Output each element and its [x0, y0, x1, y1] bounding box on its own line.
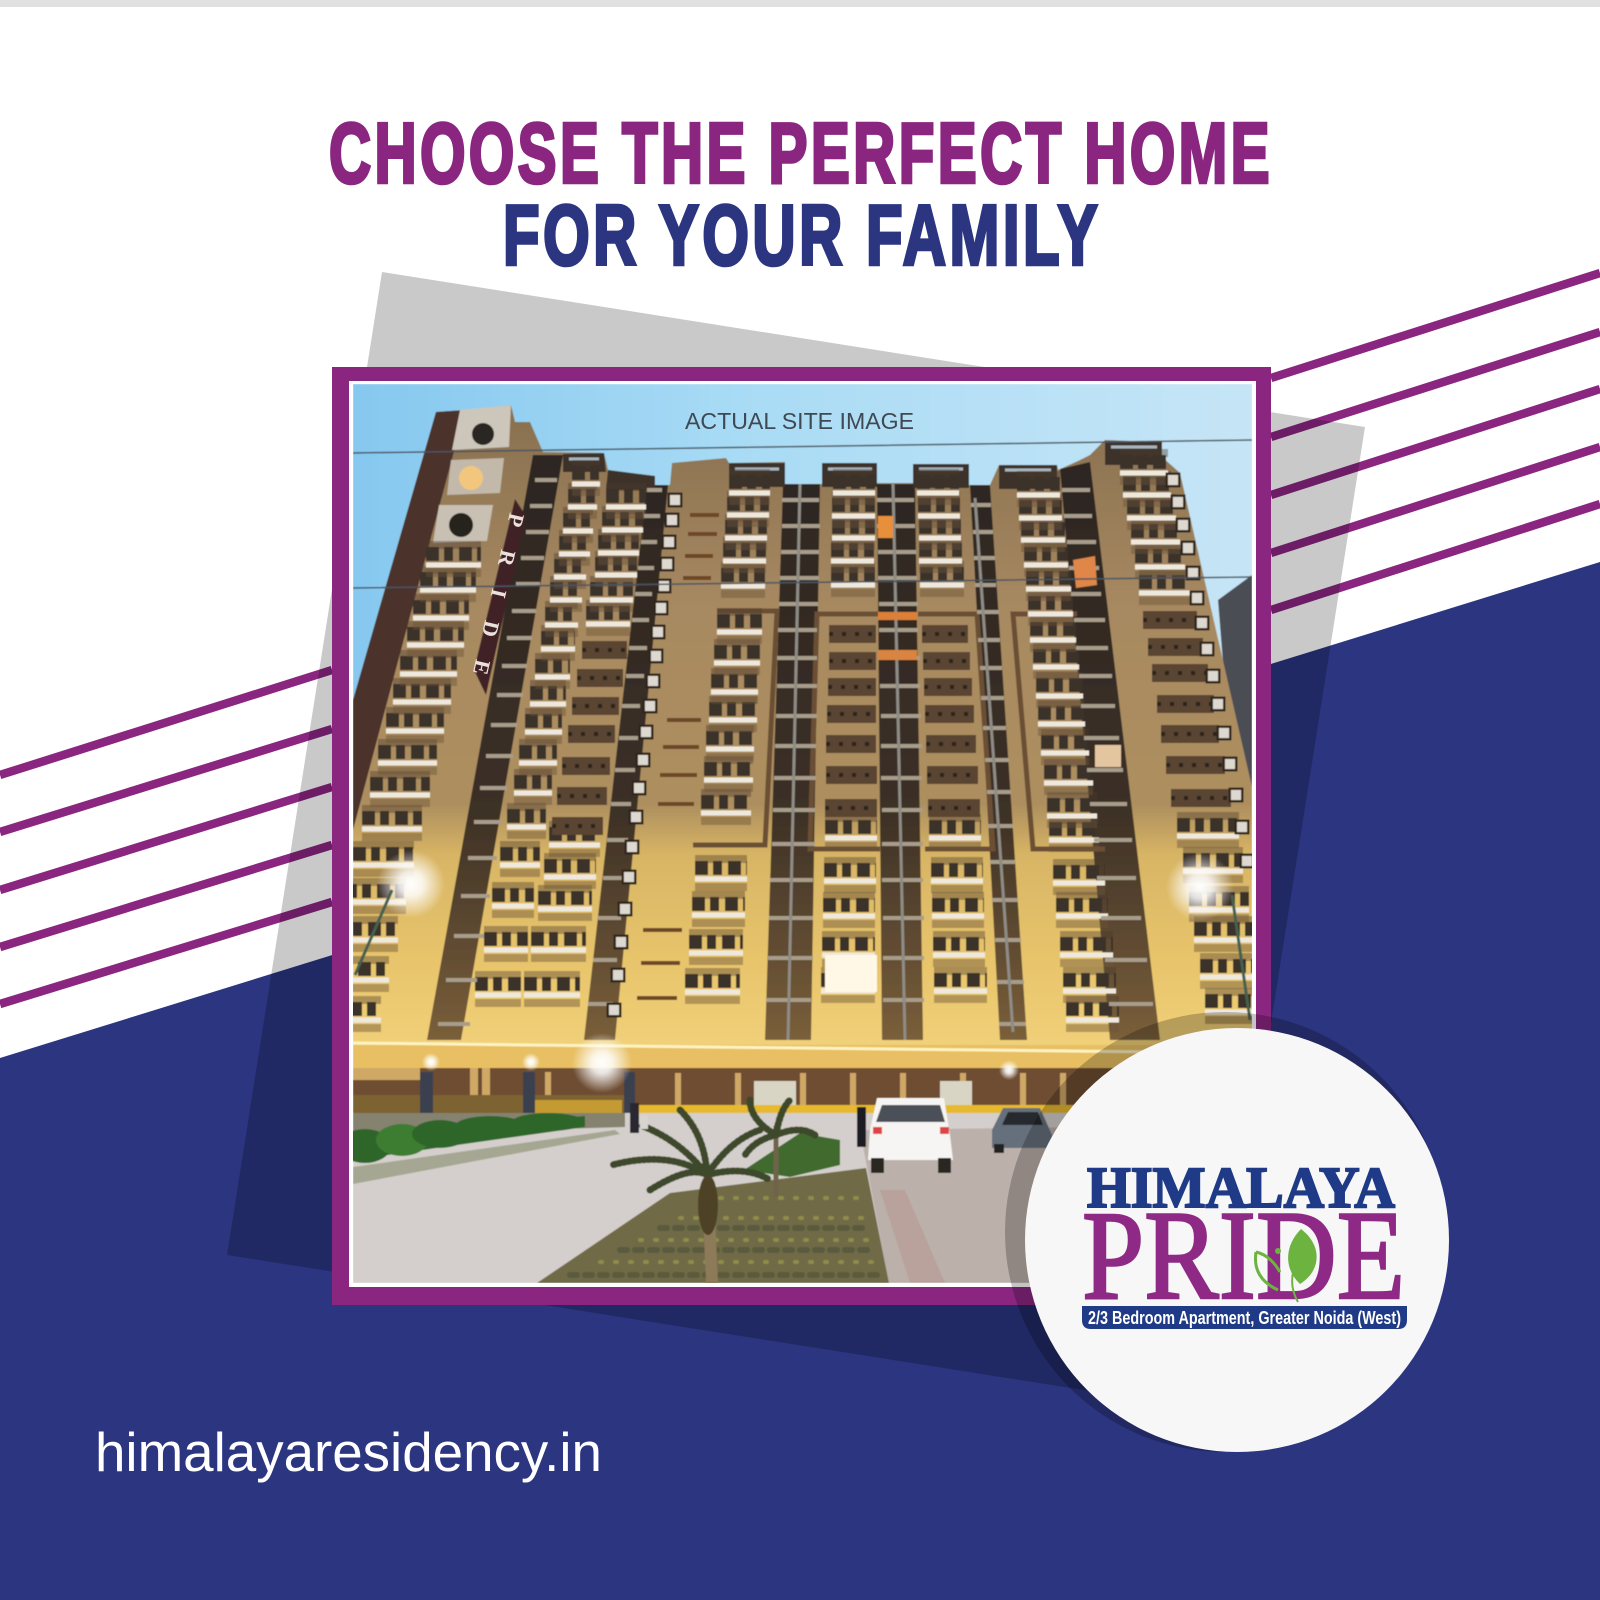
tilted grey square behind photo — [227, 272, 1365, 1410]
grey car — [992, 1108, 1052, 1153]
top grey strip — [0, 0, 1600, 7]
logo circle shadow — [1005, 1012, 1445, 1452]
lit windows — [825, 516, 1121, 992]
hedge — [339, 1113, 585, 1163]
planting bed — [537, 1168, 889, 1283]
balcony upper shade — [316, 453, 1255, 1000]
shaft pipes — [788, 484, 1013, 1040]
building silhouette — [353, 405, 1252, 1070]
wires — [353, 440, 1252, 588]
balcony shadows — [316, 481, 1255, 1028]
balcony slabs — [316, 473, 1255, 1020]
podium — [353, 1041, 1153, 1068]
roof cap highlights — [569, 447, 1157, 470]
brown balcony vents — [552, 620, 1231, 826]
brown floor bands — [693, 611, 1105, 849]
brown balcony blocks — [552, 620, 1231, 826]
street lamps — [355, 850, 1250, 1093]
side walkway — [353, 1130, 620, 1184]
logo tagline banner: 2/3 Bedroom Apartment, Greater Noida (West) — [1088, 1307, 1401, 1328]
shop level — [353, 1068, 1114, 1114]
square windows glass — [614, 480, 1247, 1010]
balcony windows and railings — [316, 462, 1255, 1009]
title — [329, 106, 1273, 284]
person with scooter — [630, 1103, 648, 1133]
website url: himalayaresidency.in — [95, 1421, 602, 1483]
sky — [353, 384, 1252, 700]
pilaster brown dashes — [637, 515, 719, 998]
purple stripes right — [1271, 273, 1600, 610]
tower top panels with circles — [433, 405, 511, 543]
photo frame — [332, 367, 1271, 1305]
palm trees — [612, 1100, 815, 1283]
sign backing — [474, 499, 526, 695]
roof caps — [563, 441, 1162, 490]
icon: leaf — [1255, 1229, 1317, 1302]
square windows frames — [614, 480, 1247, 1010]
navy diagonal background — [0, 562, 1600, 1600]
hedge near palm — [744, 1133, 840, 1177]
distant building — [1218, 575, 1252, 800]
bed flowers — [570, 1198, 885, 1275]
purple stripes left — [0, 670, 332, 1004]
sign: PRIDE: PRIDE — [468, 511, 529, 677]
person — [857, 1107, 866, 1147]
paved driveway right — [863, 1128, 1057, 1283]
stone wall — [353, 1113, 625, 1135]
white SUV — [868, 1098, 953, 1173]
driveway pink strip — [880, 1190, 945, 1283]
logo — [1082, 1155, 1407, 1329]
logo circle — [1025, 1028, 1449, 1452]
photo: apartment building — [316, 384, 1255, 1283]
ground pavement — [353, 1112, 1068, 1283]
title line 2: FOR YOUR FAMILY — [503, 188, 1101, 284]
recessed dark shafts — [427, 455, 1160, 1040]
site image caption: ACTUAL SITE IMAGE — [685, 408, 914, 434]
logo: PRIDE: PRIDE — [1082, 1186, 1405, 1326]
dark brown strip — [353, 410, 465, 830]
shaft slabs — [438, 480, 1153, 1024]
logo: HIMALAYA: HIMALAYA — [1087, 1155, 1395, 1220]
